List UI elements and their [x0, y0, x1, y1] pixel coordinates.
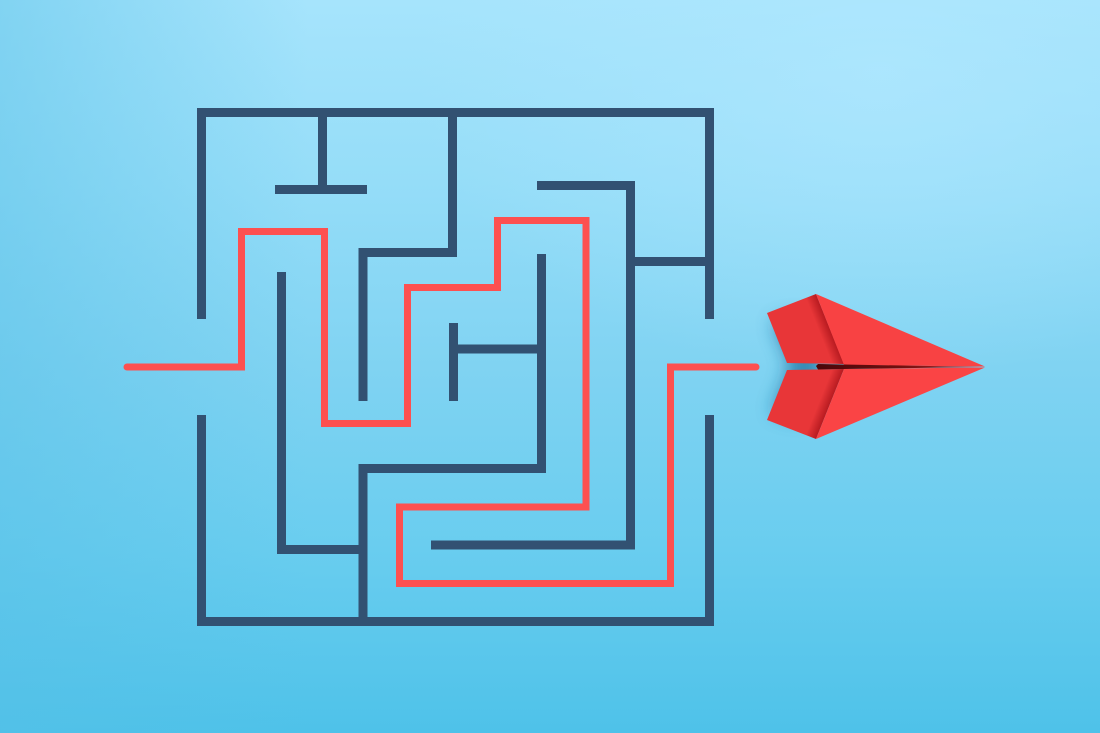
upper right wing	[816, 294, 985, 366]
lower right wing	[816, 368, 985, 439]
paper plane	[767, 294, 985, 439]
upper left wing	[767, 294, 844, 364]
centre slit	[816, 364, 985, 370]
red solution path	[127, 220, 756, 584]
maze walls	[202, 112, 710, 622]
plane shadow	[772, 315, 825, 420]
lower left wing	[767, 369, 844, 439]
